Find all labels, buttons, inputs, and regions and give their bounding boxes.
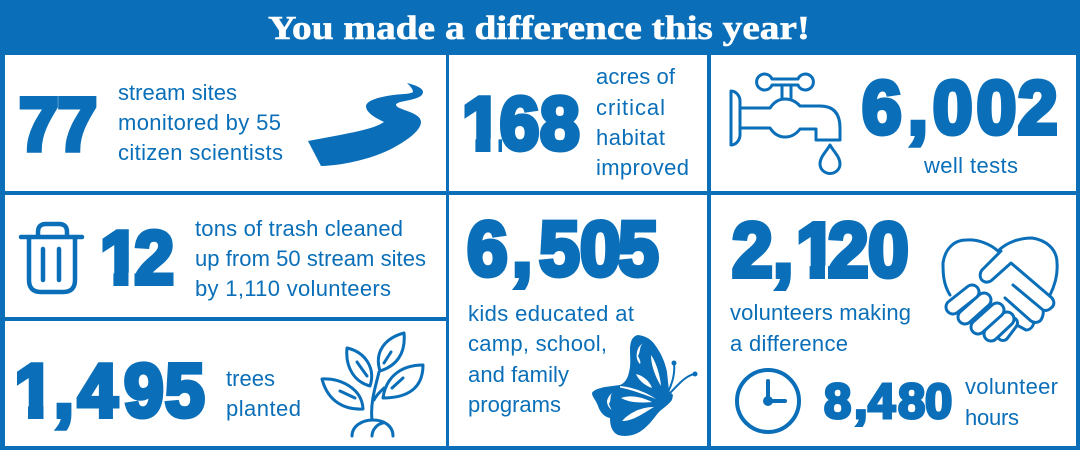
- number: 12: 12: [100, 217, 174, 300]
- panel: trash cleanup: [5, 195, 446, 317]
- number: 6,002: 6,002: [862, 67, 1058, 150]
- icon: heart handshake: [943, 238, 1057, 335]
- text: habitat description: [596, 64, 689, 180]
- text: volunteers description: [730, 300, 911, 356]
- text: volunteer hours: [965, 374, 1058, 430]
- number: 2,120: 2,120: [732, 207, 909, 293]
- panel: volunteers: [711, 195, 1076, 446]
- text: trash description: tons of trash cleaned: [195, 216, 403, 241]
- text: kids description: camp, school,: [468, 331, 607, 356]
- text: kids description: kids educated at: [468, 301, 634, 326]
- text: volunteers description: volunteers making: [730, 300, 911, 325]
- title banner: [0, 0, 1080, 55]
- finger capsules: [953, 292, 1012, 335]
- text: volunteer hours: hours: [965, 405, 1019, 430]
- number: 8,480: 8,480: [824, 375, 952, 429]
- icon: trash can: [21, 224, 82, 292]
- text: trash description: [195, 216, 426, 301]
- text: kids description: and family: [468, 362, 569, 387]
- text: trees planted: planted: [226, 396, 301, 421]
- title: You made a difference this year!: [268, 10, 810, 47]
- text: habitat description: critical: [596, 95, 665, 120]
- text: trees planted: [226, 366, 301, 421]
- number: 168: 168: [462, 83, 580, 166]
- text: trees planted: trees: [226, 366, 275, 391]
- text: stream sites description: monitored by 55: [118, 110, 281, 135]
- icon: river: [308, 83, 423, 166]
- text: trash description: by 1,110 volunteers: [195, 276, 391, 301]
- text: trash description: up from 50 stream sites: [195, 246, 426, 271]
- text: stream sites description: [118, 80, 283, 165]
- text: volunteers description: a difference: [730, 331, 848, 356]
- icon: butterfly: [592, 335, 698, 436]
- panel: well tests: [711, 55, 1076, 191]
- text: habitat description: acres of: [596, 64, 676, 89]
- text: volunteer hours: volunteer: [965, 374, 1058, 399]
- text: habitat description: habitat: [596, 125, 665, 150]
- icon: clock: [737, 370, 799, 432]
- panel: trees planted: [5, 321, 446, 446]
- panel: stream sites: [5, 55, 446, 191]
- text: kids description: programs: [468, 392, 561, 417]
- text: stream sites description: citizen scientists: [118, 140, 283, 165]
- text: habitat description: improved: [596, 155, 689, 180]
- panel: kids educated: [449, 195, 707, 446]
- number: 6,505: 6,505: [467, 206, 659, 292]
- text: stream sites description: stream sites: [118, 80, 237, 105]
- icon: faucet: [731, 74, 840, 174]
- panel: habitat acres: [449, 55, 707, 191]
- number: 77: 77: [19, 84, 97, 167]
- text: well tests: well tests: [923, 153, 1018, 178]
- icon: seedling: [322, 333, 423, 436]
- number: 1,495: 1,495: [15, 350, 205, 433]
- text: kids description: [468, 301, 634, 417]
